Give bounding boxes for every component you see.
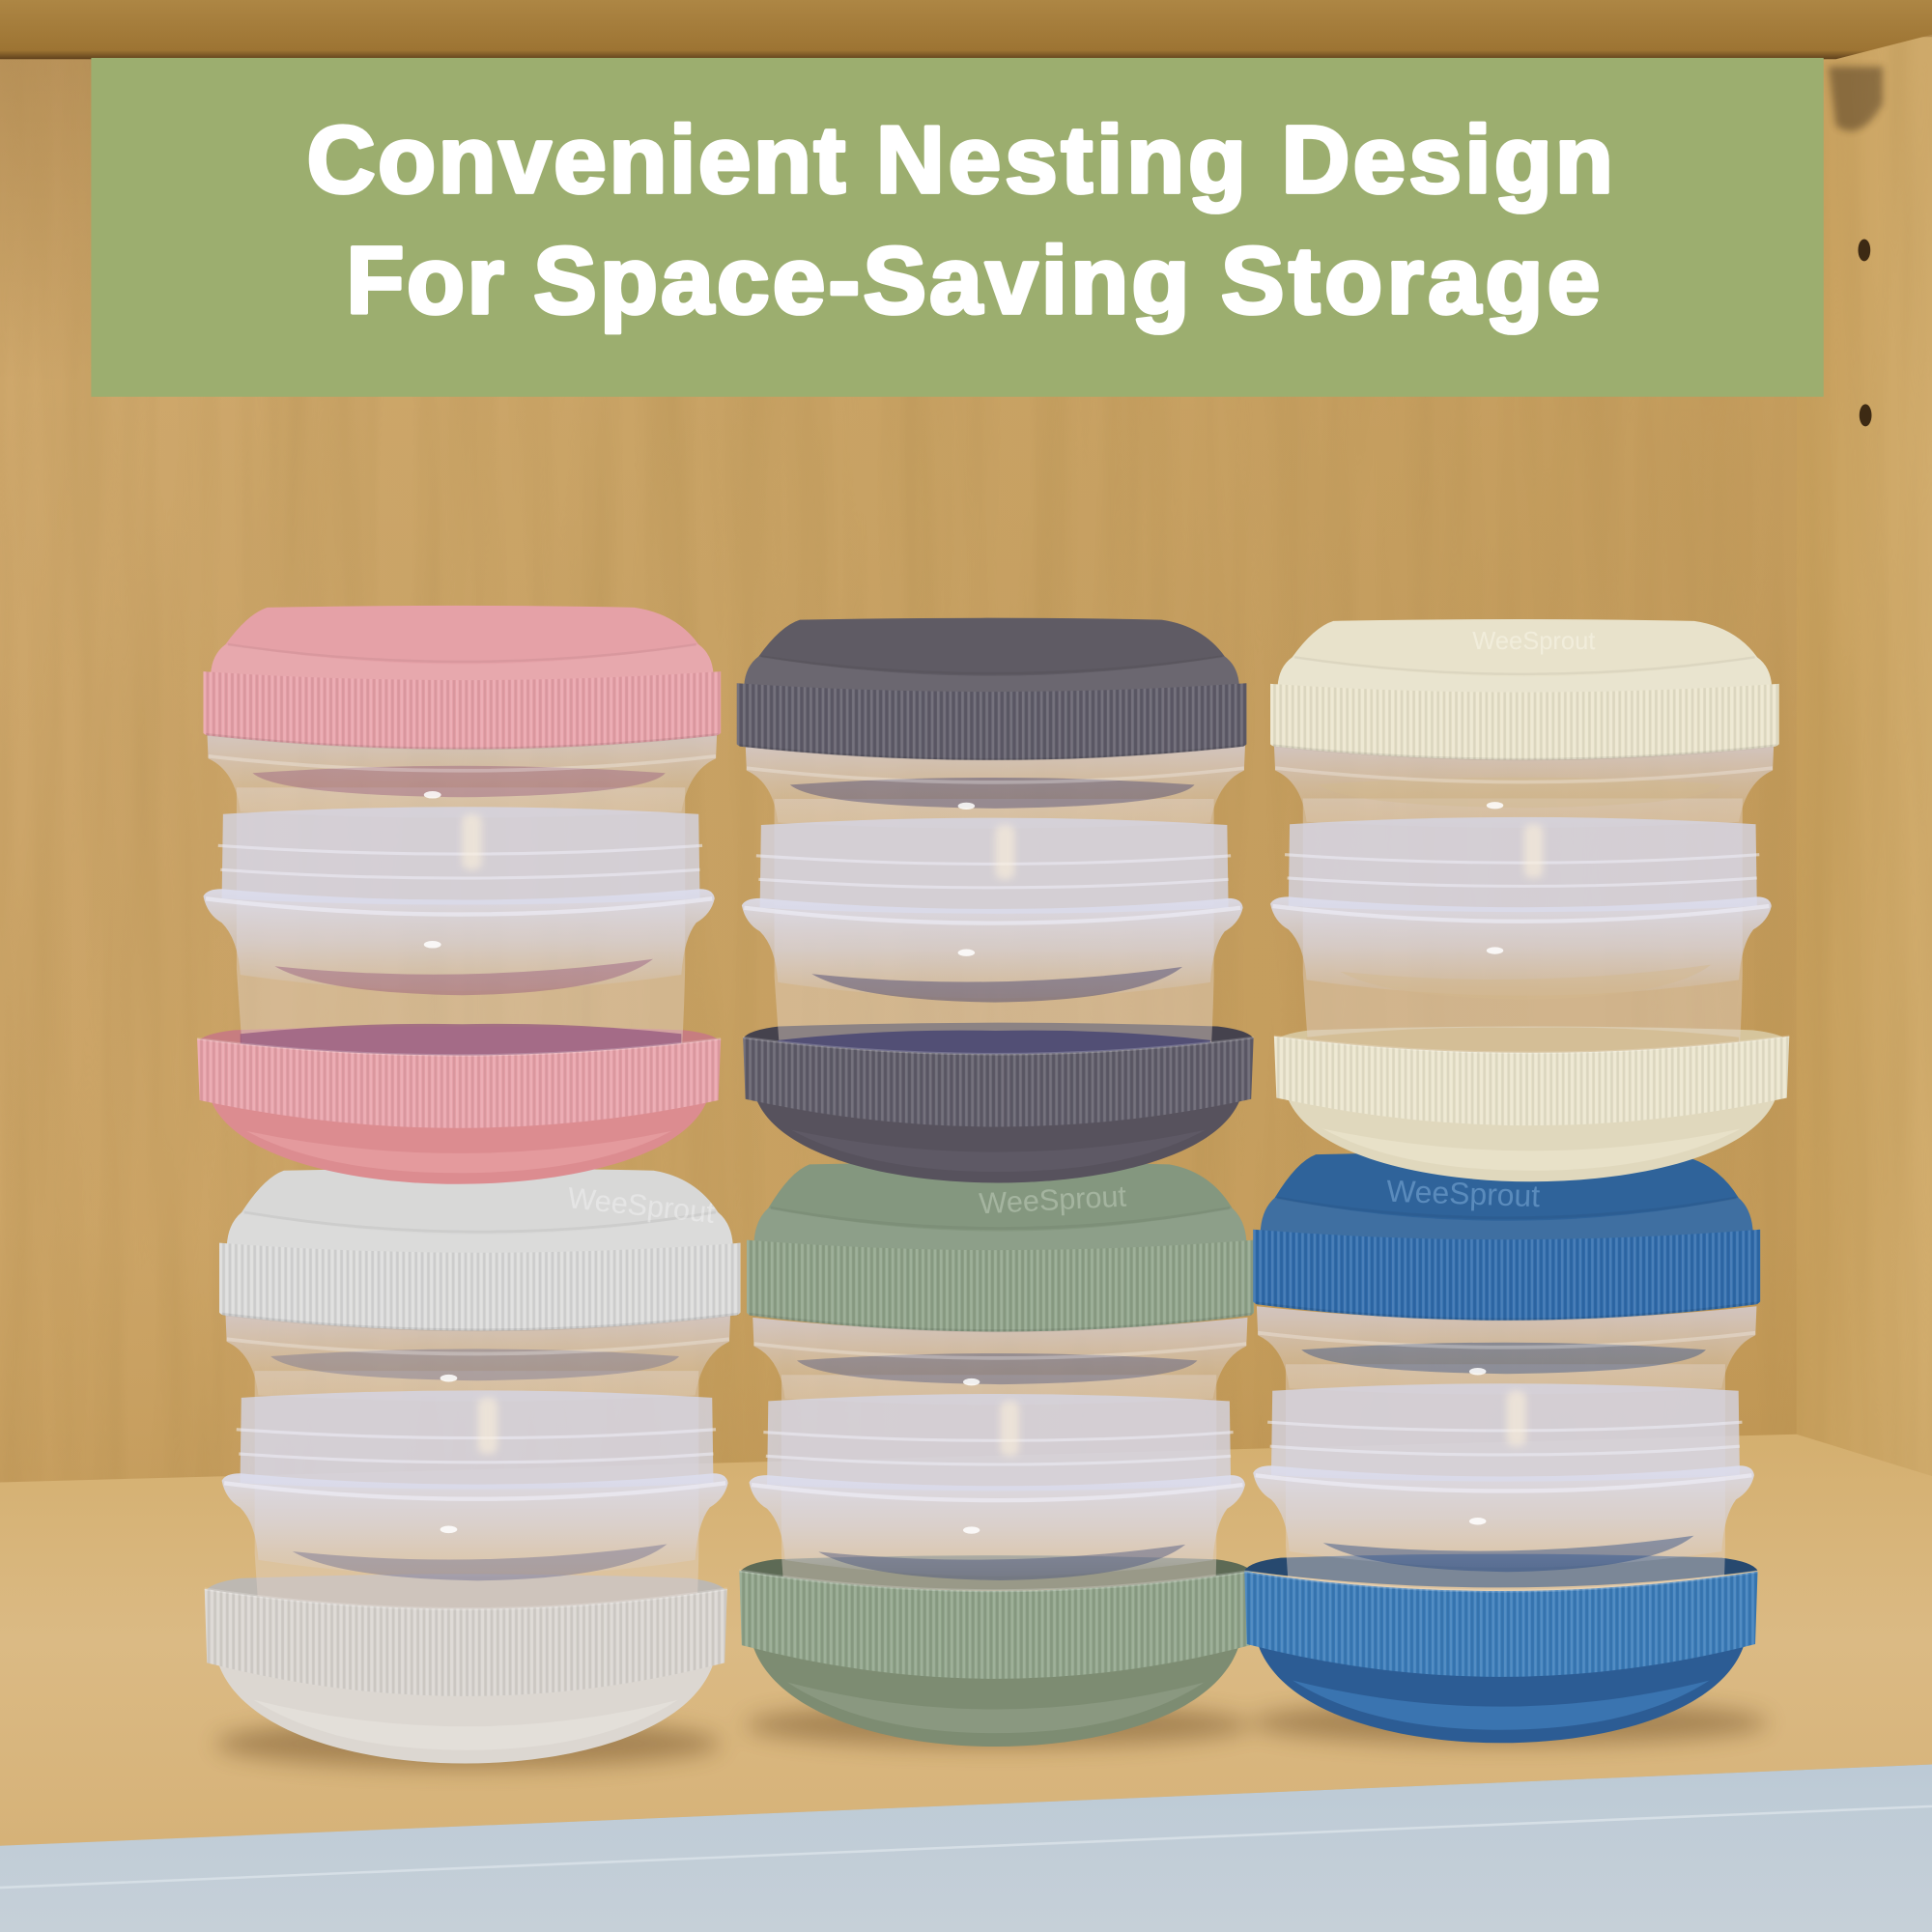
pink base bbox=[197, 1038, 721, 1184]
brand mark: WeeSprout bbox=[1472, 628, 1595, 655]
cream base bbox=[1274, 1037, 1789, 1181]
brand mark: WeeSprout bbox=[566, 1181, 717, 1230]
blue base rim bbox=[1244, 1554, 1758, 1587]
stack: cream container top row bbox=[1270, 619, 1789, 1181]
title text: Nesting bbox=[876, 106, 1250, 213]
stack: grey container bottom row bbox=[205, 1169, 741, 1764]
cream lid bbox=[1270, 619, 1779, 760]
shelf floor bbox=[0, 1435, 1932, 1846]
stack: blue container bottom row bbox=[1244, 1152, 1760, 1743]
shelf shadows under stacks bbox=[215, 1700, 1768, 1768]
title text: Space-Saving bbox=[533, 227, 1193, 333]
top shelf bbox=[0, 0, 1932, 59]
grey base rim bbox=[205, 1574, 727, 1611]
cream base rim bbox=[1274, 1026, 1789, 1059]
grey clear container bbox=[222, 1313, 730, 1645]
charcoal clear container bbox=[742, 742, 1245, 1065]
title text: Storage bbox=[1221, 227, 1605, 333]
cream clear container bbox=[1270, 742, 1774, 1062]
green base rim bbox=[739, 1555, 1253, 1591]
blue lid bbox=[1253, 1152, 1760, 1321]
green base bbox=[739, 1571, 1253, 1747]
title banner bbox=[91, 58, 1824, 397]
grey lid bbox=[219, 1169, 741, 1330]
stack: green container bottom row bbox=[739, 1162, 1254, 1747]
stack: charcoal container top row bbox=[737, 618, 1254, 1182]
blue base bbox=[1244, 1572, 1758, 1743]
title text: Design bbox=[1282, 106, 1616, 213]
green clear container bbox=[750, 1318, 1247, 1644]
right side wall bbox=[1797, 37, 1932, 1479]
brand mark: WeeSprout bbox=[1386, 1174, 1541, 1213]
pink base rim bbox=[197, 1026, 721, 1059]
side wall bracket and holes bbox=[1829, 67, 1883, 426]
charcoal lid bbox=[737, 618, 1246, 760]
title text: Convenient bbox=[307, 106, 848, 213]
front white trim bbox=[0, 1765, 1932, 1932]
green lid bbox=[747, 1162, 1254, 1331]
brand mark: WeeSprout bbox=[979, 1179, 1127, 1220]
pink clear container bbox=[203, 729, 717, 1060]
grey base bbox=[205, 1589, 727, 1764]
stack: pink container top row bbox=[197, 606, 721, 1184]
pink lid bbox=[203, 606, 721, 750]
charcoal base rim bbox=[743, 1023, 1254, 1055]
charcoal base bbox=[743, 1037, 1254, 1182]
blue clear container bbox=[1253, 1306, 1756, 1635]
title text: For bbox=[346, 227, 506, 333]
